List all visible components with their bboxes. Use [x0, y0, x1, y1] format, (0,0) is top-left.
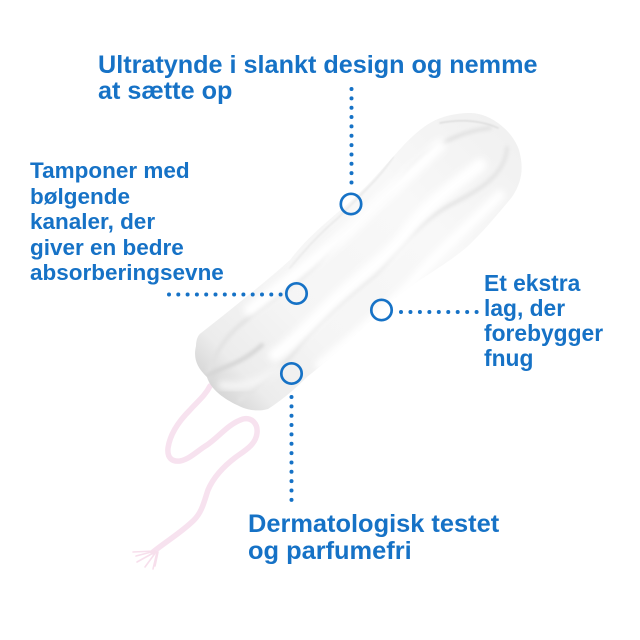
text: bottom callout: og parfumefri: [248, 537, 412, 565]
heading: top callout: at sætte op: [98, 77, 232, 105]
text: right callout: fnug: [484, 345, 533, 371]
text: right callout: Et ekstra: [484, 270, 580, 296]
marker: bottom: [281, 363, 302, 384]
string: [133, 386, 257, 569]
text: right callout: forebygger: [484, 320, 603, 346]
text: left callout: Tamponer med: [30, 158, 190, 183]
text: left callout: [30, 158, 224, 285]
text: bottom callout: Dermatologisk testet: [248, 510, 499, 538]
text: right callout: [484, 270, 603, 371]
leader: right: [401, 310, 477, 314]
text: left callout: kanaler, der: [30, 209, 155, 234]
text: left callout: absorberingsevne: [30, 260, 224, 285]
text: bottom callout: [248, 510, 499, 565]
marker: top: [341, 194, 361, 214]
leader: bottom: [290, 397, 294, 500]
leader: left: [169, 292, 281, 296]
tampon highlights: [275, 165, 480, 355]
heading: top callout: Ultratynde i slankt design og nemme: [98, 51, 537, 79]
text: right callout: lag, der: [484, 295, 565, 321]
tampon grooves: [226, 126, 490, 340]
text: left callout: bølgende: [30, 184, 130, 208]
heading: top callout: [98, 51, 537, 105]
string fray: [133, 551, 158, 569]
tampon illustration with string: [132, 113, 522, 570]
tampon body: [195, 113, 522, 410]
text: left callout: giver en bedre: [30, 234, 184, 260]
marker: left: [286, 283, 307, 304]
marker: right: [371, 300, 392, 320]
leader: top: [350, 89, 354, 184]
